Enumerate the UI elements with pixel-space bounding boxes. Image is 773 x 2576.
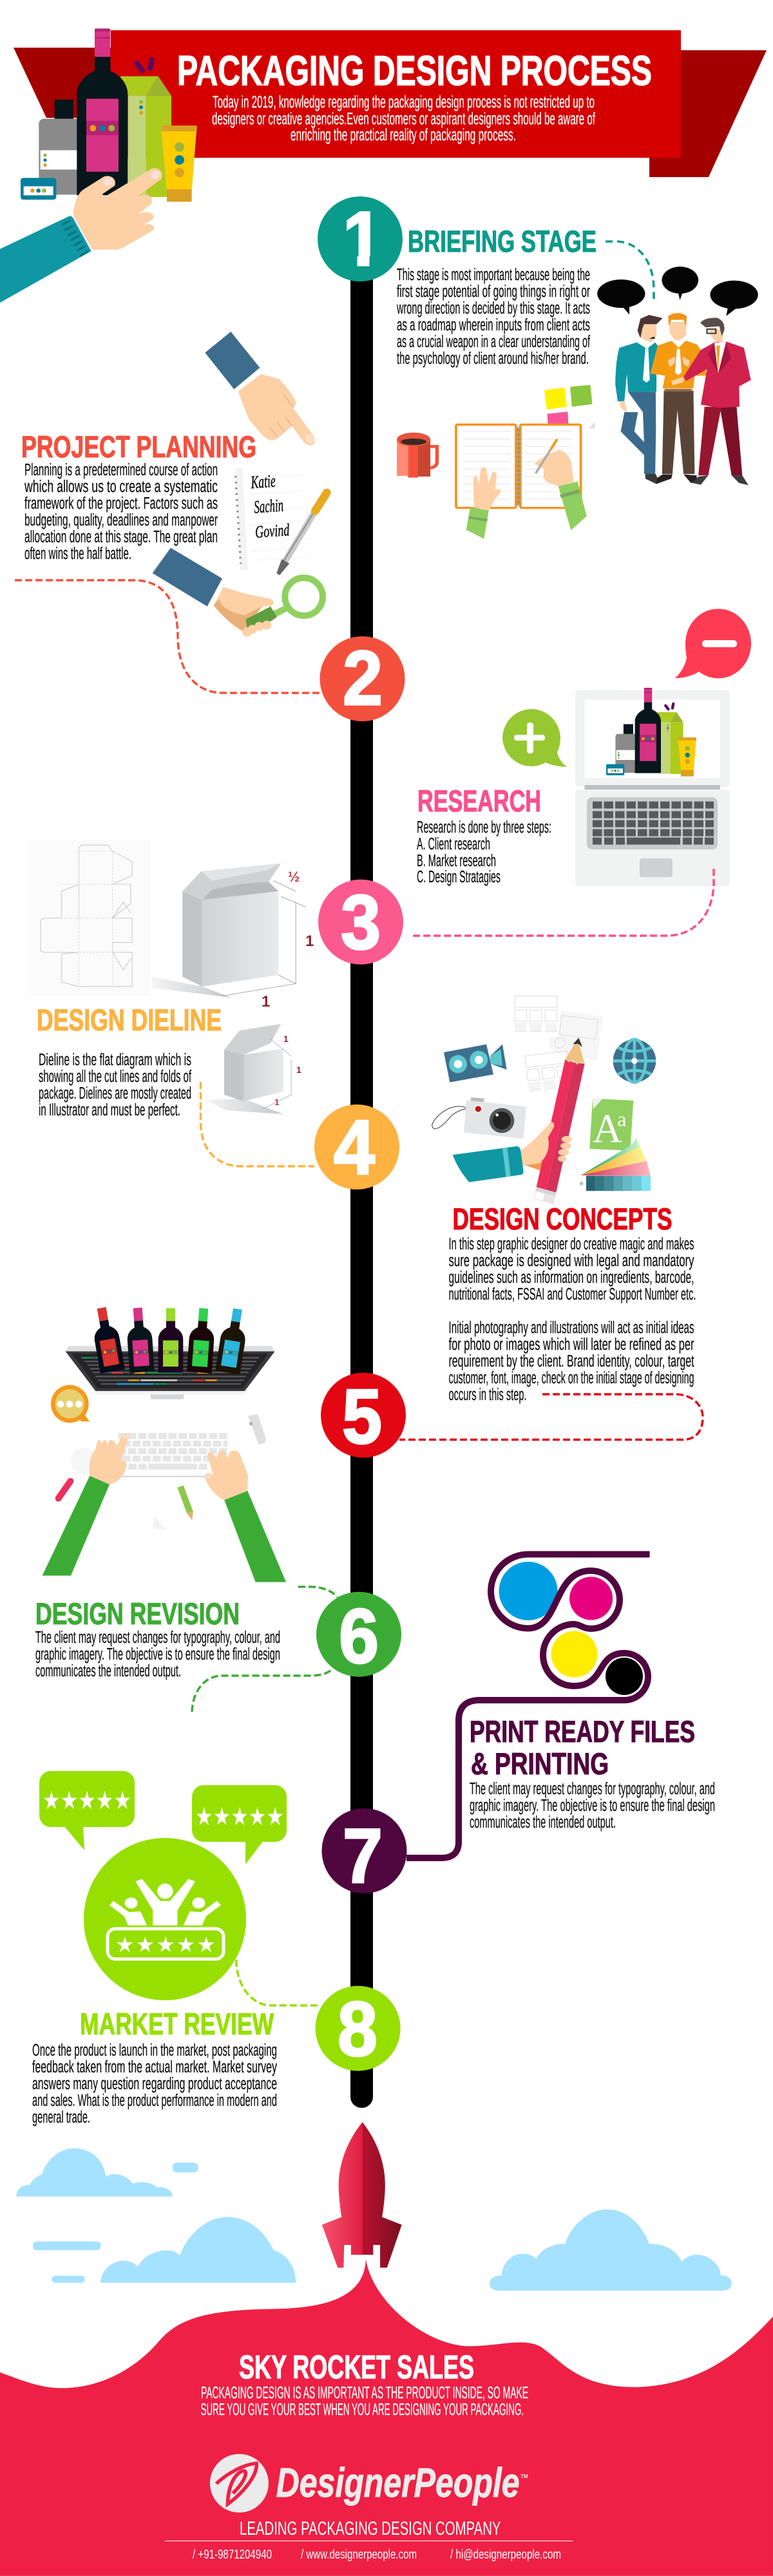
connector: dieline dashed line bbox=[201, 1082, 314, 1166]
speech bubbles bbox=[597, 267, 758, 316]
illustration: rocket bbox=[322, 2122, 402, 2268]
dimension labels: 1 bbox=[262, 993, 270, 1010]
text: market review body: Once the product is launch in the market, post packaging bbox=[32, 2041, 277, 2060]
contact details bbox=[193, 2548, 561, 2562]
text: briefing body: the psychology of client around his/her brand. bbox=[397, 350, 589, 368]
paper path connecting to step 7 bbox=[406, 1555, 650, 1858]
icon: plus speech bubble bbox=[502, 709, 567, 767]
font sample card bbox=[589, 1099, 633, 1151]
laptop base bbox=[575, 790, 730, 886]
step 4 circle bbox=[314, 1104, 399, 1191]
contact details: / hi@designerpeople.com bbox=[450, 2548, 561, 2562]
text: research body: Research is done by three steps: bbox=[417, 819, 551, 837]
text: briefing body: as a roadmap wherein inputs from client acts bbox=[397, 316, 590, 334]
central timeline bar bbox=[350, 258, 373, 2108]
step 7 circle: 7 bbox=[343, 1813, 383, 1899]
logo wordmark: DesignerPeople bbox=[276, 2459, 520, 2506]
text: design dieline body bbox=[39, 1051, 192, 1119]
heading: print ready files and printing: PRINT READY FILES bbox=[470, 1714, 695, 1748]
logo: DesignerPeople bbox=[210, 2454, 528, 2513]
illustration: large box with dimensions bbox=[152, 864, 305, 998]
heading: project planning: PROJECT PLANNING bbox=[21, 430, 256, 464]
dimension labels: ½ bbox=[288, 869, 300, 885]
text: market review body: answers many question regarding product acceptance bbox=[32, 2075, 277, 2093]
connector: research dashed line bbox=[412, 869, 714, 936]
chat bubble icon bbox=[51, 1385, 90, 1423]
handwritten names: Katie bbox=[250, 471, 276, 493]
banner right ribbon bbox=[649, 50, 767, 177]
text: project planning body: allocation done at this stage. The great plan bbox=[24, 528, 218, 546]
man in orange shirt bbox=[650, 313, 707, 484]
giant pencil and hand bbox=[453, 1038, 585, 1204]
text: design revision body: communicates the intended output. bbox=[35, 1662, 181, 1680]
heading: research: RESEARCH bbox=[417, 784, 541, 818]
left review bubble bbox=[39, 1771, 135, 1850]
illustration: small box: 1 bbox=[296, 1065, 301, 1075]
trackpad bbox=[640, 858, 673, 877]
heading: print ready files and printing: & PRINTING bbox=[471, 1747, 609, 1781]
colour swatch fan bbox=[580, 1138, 651, 1191]
text: design revision body bbox=[35, 1629, 280, 1680]
handwritten names bbox=[250, 471, 291, 542]
step 3 circle: 3 bbox=[341, 879, 381, 965]
text: research body: B. Market research bbox=[417, 852, 496, 870]
heading: market review: MARKET REVIEW bbox=[80, 2007, 274, 2041]
text: briefing body: first stage potential of going things in right or bbox=[397, 283, 590, 301]
right review bubble bbox=[192, 1785, 287, 1864]
banner left ribbon bbox=[14, 48, 116, 118]
connector: design revision lower dashes bbox=[192, 1671, 330, 1713]
cheering people icon bbox=[110, 1879, 221, 1926]
text: briefing body: This stage is most important because being the bbox=[397, 266, 590, 284]
handwritten names: Sachin bbox=[253, 496, 284, 518]
left review bubble: ★★★★★ bbox=[43, 1786, 131, 1815]
contact details: / +91-9871204940 bbox=[193, 2548, 272, 2562]
heading: sky rocket sales: SKY ROCKET SALES bbox=[239, 2349, 474, 2385]
text: briefing body: as a crucial weapon in a clear understanding of bbox=[397, 333, 591, 351]
right review bubble: ★★★★★ bbox=[195, 1803, 284, 1832]
text: project planning body bbox=[24, 461, 218, 563]
text: research body bbox=[417, 819, 551, 886]
text: market review body: and sales. What is the product performance in modern and bbox=[32, 2092, 277, 2110]
sticky notes bbox=[544, 385, 595, 429]
illustration: small box: 1 bbox=[274, 1097, 280, 1107]
illustration: notebook, mug and sticky notes bbox=[397, 385, 595, 539]
handwritten names: Govind bbox=[254, 520, 291, 542]
heading: design concepts: DESIGN CONCEPTS bbox=[452, 1202, 673, 1236]
heading: design revision: DESIGN REVISION bbox=[35, 1596, 240, 1631]
font sample card: A bbox=[593, 1106, 622, 1151]
step 6 circle bbox=[316, 1592, 401, 1680]
intro text: enriching the practical reality of packaging process. bbox=[291, 126, 516, 144]
text: print ready body bbox=[470, 1780, 715, 1832]
step 3 circle bbox=[318, 879, 403, 965]
keyboard bbox=[118, 1436, 227, 1477]
illustration: flat dieline diagram bbox=[27, 840, 150, 996]
text: briefing body: wrong direction is decided by this stage. It acts bbox=[396, 299, 590, 317]
wireframe sheets bbox=[515, 996, 603, 1092]
illustration: pointing hand with teal sleeve bbox=[0, 168, 162, 303]
heading: briefing stage: BRIEFING STAGE bbox=[408, 224, 596, 258]
text: project planning body: Planning is a predetermined course of action bbox=[24, 461, 218, 479]
connector: design concepts dashed line bbox=[399, 1394, 703, 1440]
monitor bbox=[66, 1346, 275, 1399]
text: briefing body bbox=[396, 266, 591, 368]
pen bbox=[276, 493, 327, 575]
video camera icon bbox=[444, 1045, 507, 1083]
black roller bbox=[606, 1658, 643, 1695]
text: company tagline: LEADING PACKAGING DESIGN COMPANY bbox=[240, 2518, 501, 2539]
illustration: products on laptop screen bbox=[606, 688, 696, 777]
open notebook bbox=[456, 424, 581, 508]
illustration: market review circle with cheering people bbox=[84, 1838, 246, 2000]
step 2 circle bbox=[320, 635, 405, 721]
illustration: review bubbles with stars bbox=[39, 1771, 287, 1864]
desk items bbox=[59, 1414, 266, 1530]
step 6 circle: 6 bbox=[339, 1593, 379, 1680]
footer red wave bbox=[0, 2259, 773, 2576]
text: print ready body: communicates the intended output. bbox=[470, 1814, 616, 1832]
illustration: small box bbox=[206, 1024, 301, 1114]
text: research body: C. Design Stratagies bbox=[417, 868, 501, 886]
man in teal shirt bbox=[615, 315, 663, 484]
photo camera icon bbox=[432, 1097, 526, 1139]
connector: design revision upper dashes bbox=[298, 1587, 338, 1597]
step 8 circle: 8 bbox=[338, 1986, 377, 2072]
step 1 circle bbox=[318, 196, 403, 282]
illustration: product packages bbox=[21, 28, 197, 202]
text: design dieline body: package. Dielines are mostly created bbox=[39, 1084, 191, 1103]
five wine bottles bbox=[90, 1305, 250, 1374]
text: sky rocket sales tagline bbox=[201, 2384, 528, 2419]
illustration: laptop with products bbox=[575, 690, 730, 886]
step 7 circle bbox=[322, 1808, 407, 1899]
illustration: three businessmen with speech bubbles bbox=[597, 267, 758, 485]
text: research body: A. Client research bbox=[417, 835, 490, 853]
text: project planning body: budgeting, quality, deadlines and manpower bbox=[24, 511, 218, 529]
heading: print ready files and printing bbox=[470, 1714, 695, 1781]
text: project planning body: often wins the half battle. bbox=[24, 545, 131, 563]
step 1 circle: 1 bbox=[343, 196, 383, 282]
text: design dieline body: in Illustrator and must be perfect. bbox=[39, 1101, 180, 1119]
header banner bbox=[14, 30, 767, 177]
keyboard bbox=[587, 797, 718, 849]
text: project planning body: which allows us to create a systematic bbox=[24, 478, 218, 496]
step 8 circle bbox=[316, 1986, 401, 2072]
text: design dieline body: Dieline is the flat diagram which is bbox=[39, 1051, 191, 1069]
contact details: / www.designerpeople.com bbox=[301, 2548, 417, 2562]
rating bar: ★★★★★ bbox=[115, 1932, 216, 1957]
connector: briefing dashed line bbox=[606, 242, 654, 300]
font sample card: a bbox=[617, 1107, 627, 1130]
intro text bbox=[212, 93, 596, 144]
writing hands bbox=[466, 440, 587, 539]
illustration: monitor with bottles and typing hands bbox=[43, 1305, 286, 1582]
text: design concepts body: occurs in this step. bbox=[448, 1386, 527, 1404]
logo: DesignerPeople: TM bbox=[520, 2474, 528, 2479]
step 5 circle: 5 bbox=[342, 1374, 382, 1460]
connector: project planning dashed line bbox=[15, 580, 321, 693]
illustration: name list notepad and pen bbox=[235, 468, 327, 575]
laptop screen bbox=[575, 690, 730, 787]
banner main panel bbox=[111, 30, 681, 158]
icon: minus speech bubble bbox=[675, 609, 751, 678]
text: market review body: feedback taken from the actual market. Market survey bbox=[32, 2058, 277, 2076]
dimension labels: 1 bbox=[305, 933, 314, 950]
text: project planning body: framework of the project. Factors such as bbox=[24, 495, 218, 513]
heading: design dieline: DESIGN DIELINE bbox=[37, 1003, 222, 1037]
step 2 circle: 2 bbox=[343, 635, 383, 721]
text: market review body bbox=[32, 2041, 277, 2126]
man in red suit bbox=[671, 317, 751, 485]
dimension labels bbox=[262, 869, 314, 1010]
illustration: design concept tools bbox=[432, 996, 656, 1204]
text: design concepts body bbox=[448, 1235, 696, 1404]
illustration: small box: 1 bbox=[283, 1034, 289, 1044]
text: market review body: general trade. bbox=[32, 2108, 90, 2126]
illustration: CMYK print rollers bbox=[406, 1555, 650, 1858]
coffee mug bbox=[397, 433, 437, 478]
illustration: hand holding magnifier bbox=[153, 548, 323, 637]
step 5 circle bbox=[321, 1373, 406, 1460]
illustration: pointing hand, upper bbox=[205, 332, 316, 446]
typing hands and green sleeves bbox=[43, 1434, 286, 1582]
clouds bbox=[16, 2148, 732, 2291]
yellow roller bbox=[551, 1631, 598, 1678]
text: design revision body: The client may request changes for typography, colour, and bbox=[35, 1629, 280, 1647]
step 4 circle: 4 bbox=[334, 1104, 375, 1191]
text: design dieline body: showing all the cut lines and folds of bbox=[39, 1068, 192, 1086]
text: design revision body: graphic imagery. The objective is to ensure the final design bbox=[35, 1645, 280, 1663]
logo mark bbox=[210, 2454, 269, 2513]
laptop hinge bbox=[585, 785, 720, 791]
connector: market review dashed line bbox=[236, 1960, 318, 2005]
cyan roller bbox=[499, 1562, 558, 1620]
globe icon bbox=[613, 1039, 656, 1083]
magenta roller bbox=[569, 1577, 613, 1620]
